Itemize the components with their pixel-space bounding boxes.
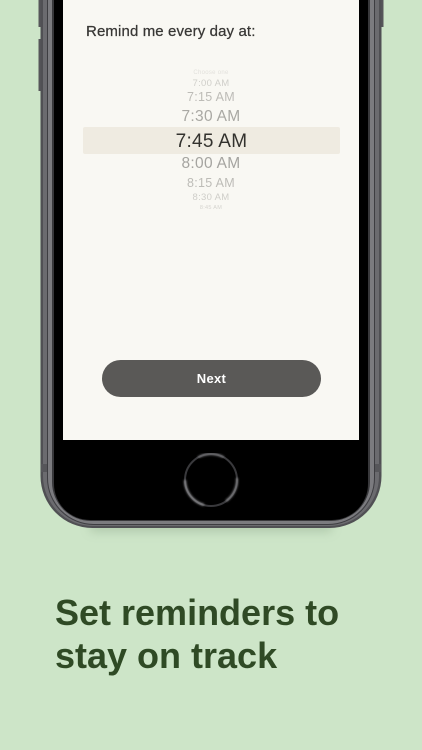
- picker selection band: [83, 127, 340, 154]
- next button: Next: [197, 371, 226, 386]
- time picker: [83, 70, 340, 211]
- picker options: Choose one: [193, 70, 229, 76]
- side buttons: [38, 0, 384, 91]
- time picker: 7:00 AM: [193, 78, 229, 89]
- phone screen: [63, 0, 359, 440]
- headline: Set reminders to: [55, 592, 339, 633]
- phone shadow: [90, 518, 332, 532]
- headline: [55, 592, 339, 676]
- time picker: 8:45 AM: [200, 205, 222, 211]
- time picker: 8:30 AM: [193, 192, 229, 203]
- antenna bands: [41, 464, 381, 472]
- time picker: 8:00 AM: [182, 155, 240, 172]
- phone illustration: [38, 0, 384, 534]
- time picker: 8:15 AM: [187, 176, 235, 190]
- next button: [102, 360, 321, 397]
- time picker: 7:15 AM: [187, 90, 235, 104]
- reminder prompt: Remind me every day at:: [86, 23, 256, 40]
- phone bezel: [54, 0, 368, 520]
- headline: stay on track: [55, 635, 277, 676]
- time picker: 7:45 AM: [176, 130, 247, 152]
- phone frame: [40, 0, 382, 528]
- home button: [185, 454, 237, 506]
- time picker: 7:30 AM: [182, 108, 240, 125]
